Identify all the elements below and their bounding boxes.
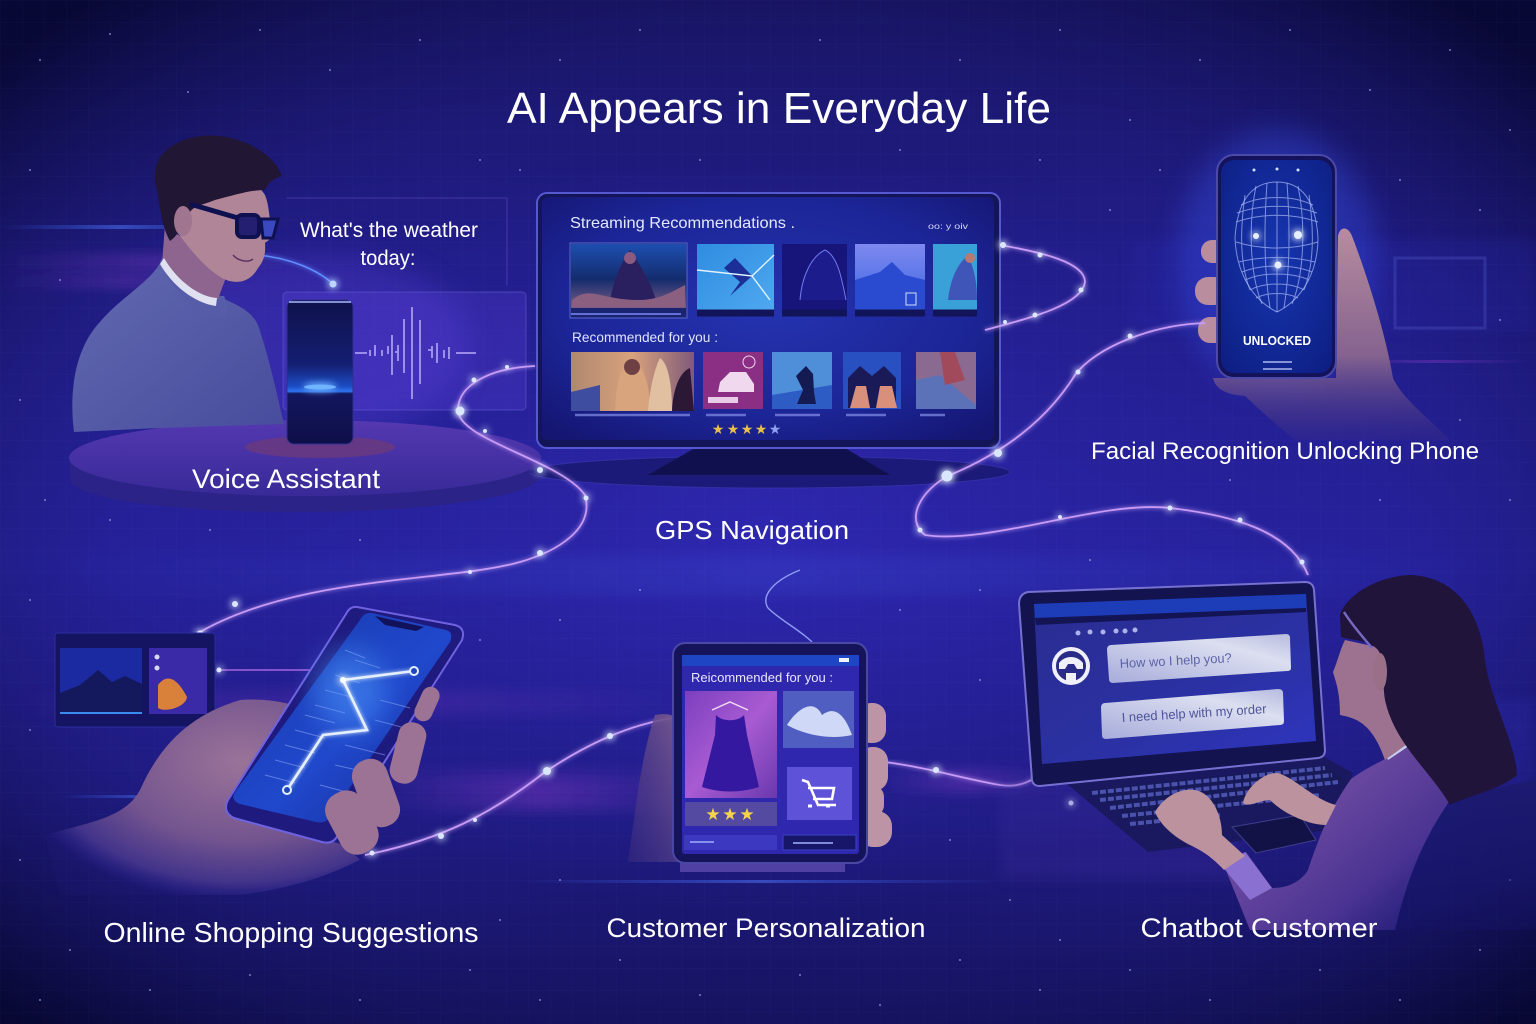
rating stars: ★ [727,421,739,437]
label: facial recognition: Facial Recognition Unlocking Phone [1091,438,1479,465]
rating stars: ★ [755,421,767,437]
background monitor [55,633,215,727]
laptop screen [1034,594,1316,764]
rating stars: ★ [705,805,721,824]
notch [375,616,424,631]
label: customer personalization: Customer Personalization [606,913,926,943]
fingers [319,684,443,861]
face mesh [1235,182,1318,312]
path nodes [196,242,1304,856]
person with glasses [72,135,284,432]
table [69,420,541,512]
rating stars [712,421,781,437]
hand holding phone [1213,228,1450,440]
speech text: What's the weather [300,219,478,242]
route line [287,671,414,790]
chat bubble: user: I need help with my order [1121,701,1268,725]
status: unlocked: UNLOCKED [1243,333,1311,348]
rating stars: ★ [722,805,738,824]
dress product tile [685,691,777,798]
label: chatbot customer: Chatbot Customer [1140,913,1378,943]
label: GPS navigation: GPS Navigation [655,515,849,545]
hands on keyboard [1155,773,1336,870]
rating stars: ★ [712,421,724,437]
hand: palm [45,699,360,895]
cart tile [787,767,852,820]
phone screen [233,613,451,822]
chat bubble: bot [1107,634,1291,683]
rating stars [705,805,755,824]
label: voice assistant: Voice Assistant [192,464,381,494]
laptop base [1066,757,1353,852]
rating stars: ★ [769,421,781,437]
map lines [265,650,410,793]
phone body [226,607,463,843]
photo tile [783,691,854,748]
panel: voice assistant [69,135,541,512]
panel: facial recognition phone [1091,130,1479,465]
window dots [1078,630,1135,633]
rating stars: ★ [739,805,755,824]
person typing [1222,575,1536,930]
connecting light paths [200,245,1308,855]
camera dots [1254,169,1298,170]
panel: GPS phone [45,607,478,948]
laptop lid [1019,582,1325,786]
fingers [1195,240,1228,343]
panel: tablet [606,643,926,943]
heading: streaming recommendations: Streaming Recommendations . [570,215,795,232]
speech text: today: [360,247,416,270]
panel: chatbot laptop [1000,575,1536,943]
icon: chatbot [1054,649,1088,683]
heading: recommended for you: Reicommended for you : [691,670,833,685]
heading: recommended for you: Recommended for you : [572,329,718,345]
fingers [858,703,892,847]
row 1 thumbnails [570,243,977,318]
route endpoints [283,667,418,794]
icon: smart speaker [287,300,353,444]
hand behind tablet [628,714,682,862]
label: online shopping suggestions: Online Shopping Suggestions [104,917,478,948]
chat bubble: bot: How wo I help you? [1119,650,1232,671]
chat bubble: user [1101,689,1284,739]
panel: streaming TV [530,193,1010,488]
rating stars: ★ [741,421,753,437]
title: AI Appears in Everyday Life [507,84,1051,133]
row 2 thumbnails [571,352,976,415]
small status text: oo: y oiv [928,222,968,231]
sound wave [355,307,476,399]
speech text [300,219,478,270]
